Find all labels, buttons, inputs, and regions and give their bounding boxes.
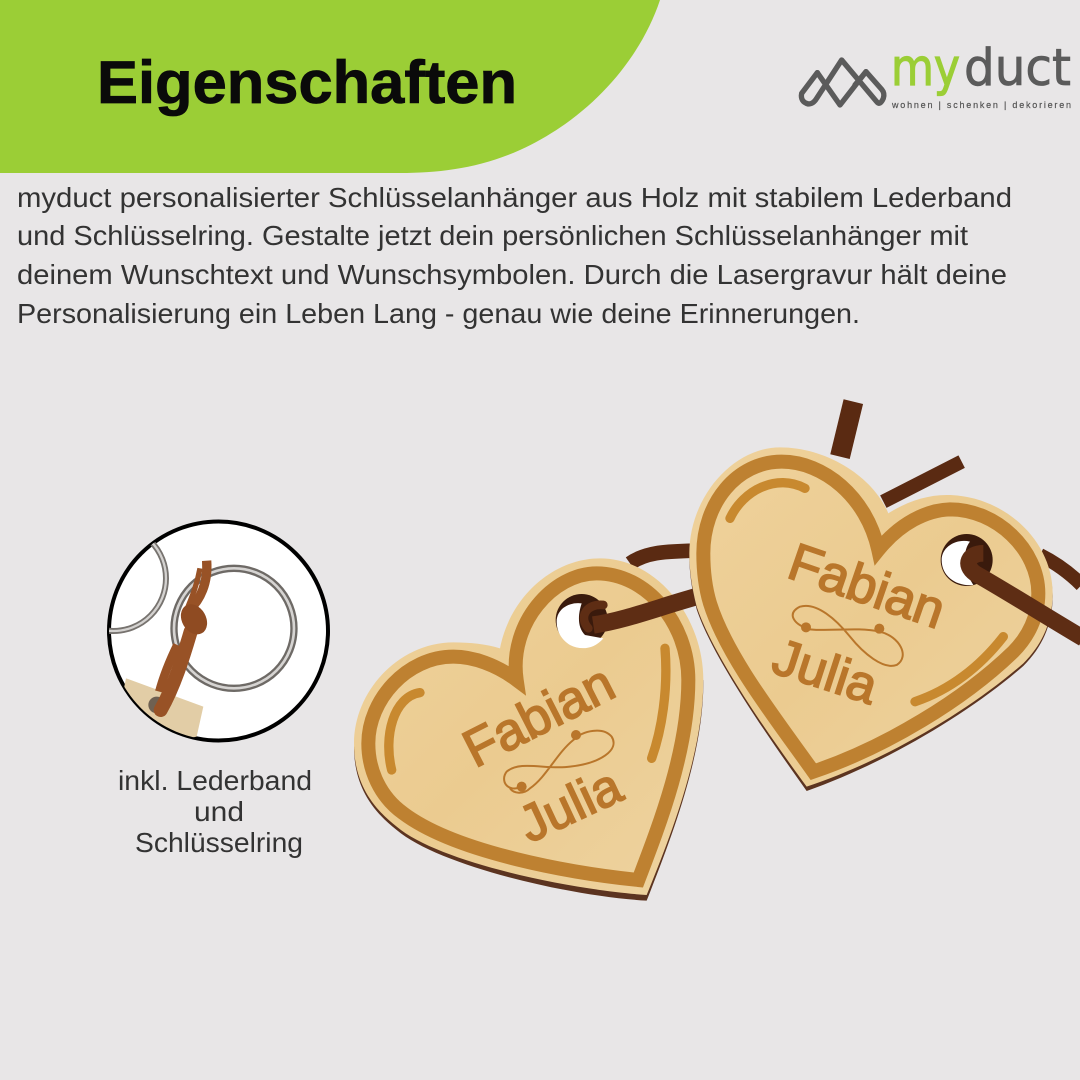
heart edge shadow [354, 680, 703, 901]
icon: wooden tag [124, 678, 204, 738]
back cord strand [630, 551, 693, 563]
icon: leather cord [159, 561, 207, 710]
inset caption [118, 765, 312, 858]
engraved infinity symbol [504, 730, 614, 793]
engraved infinity symbol [793, 606, 903, 666]
intro text block: myduct personalisierter Schlüsselanhänger aus Holz mit stabilem Lederband [17, 182, 1012, 213]
icon: second key ring [109, 542, 169, 634]
engraved names [766, 532, 953, 715]
engraved names: Julia [509, 756, 631, 853]
logo icon: mountains [801, 60, 884, 105]
engraved arcs [389, 648, 666, 770]
engraved border [703, 462, 1038, 772]
logo: myduct [801, 39, 1071, 110]
product: right heart keychain [689, 402, 1080, 791]
engraved names [454, 653, 631, 853]
inset photo: leather cord and key ring [107, 520, 330, 742]
back cord strands [840, 402, 1080, 585]
intro text block: und Schlüsselring. Gestalte jetzt dein persönlichen Schlüsselanhänger mit [17, 220, 968, 251]
intro text block: Personalisierung ein Leben Lang - genau wie deine Erinnerungen. [17, 298, 860, 329]
cord hole [941, 534, 993, 586]
intro text block: deinem Wunschtext und Wunschsymbolen. Durch die Lasergravur hält deine [17, 259, 1007, 290]
logo wordmark: duct [964, 39, 1071, 98]
icon: tag hole [148, 696, 160, 713]
logo wordmark [891, 39, 1071, 98]
engraved arcs [730, 483, 1003, 702]
logo wordmark: my [891, 39, 960, 98]
inset caption: Schlüsselring [135, 827, 303, 858]
engraved border [368, 573, 688, 880]
product: left heart keychain [354, 551, 703, 901]
inset caption: inkl. Lederband [118, 765, 312, 796]
front cord [584, 597, 697, 628]
cord hole [556, 594, 608, 646]
heart edge shadow [689, 498, 1053, 791]
front cord [969, 553, 1080, 638]
logo tagline: wohnen | schenken | dekorieren [891, 100, 1071, 110]
intro text block [17, 182, 1012, 329]
icon: cord knot [180, 604, 208, 634]
icon: key ring [174, 568, 294, 688]
inset caption: und [194, 796, 244, 827]
heart body [354, 558, 703, 895]
engraved names: Julia [766, 627, 885, 715]
title: Eigenschaften [97, 49, 517, 116]
heart body [689, 447, 1053, 787]
header: green shape [0, 0, 660, 173]
engraved names: Fabian [781, 532, 953, 640]
engraved names: Fabian [454, 653, 624, 779]
